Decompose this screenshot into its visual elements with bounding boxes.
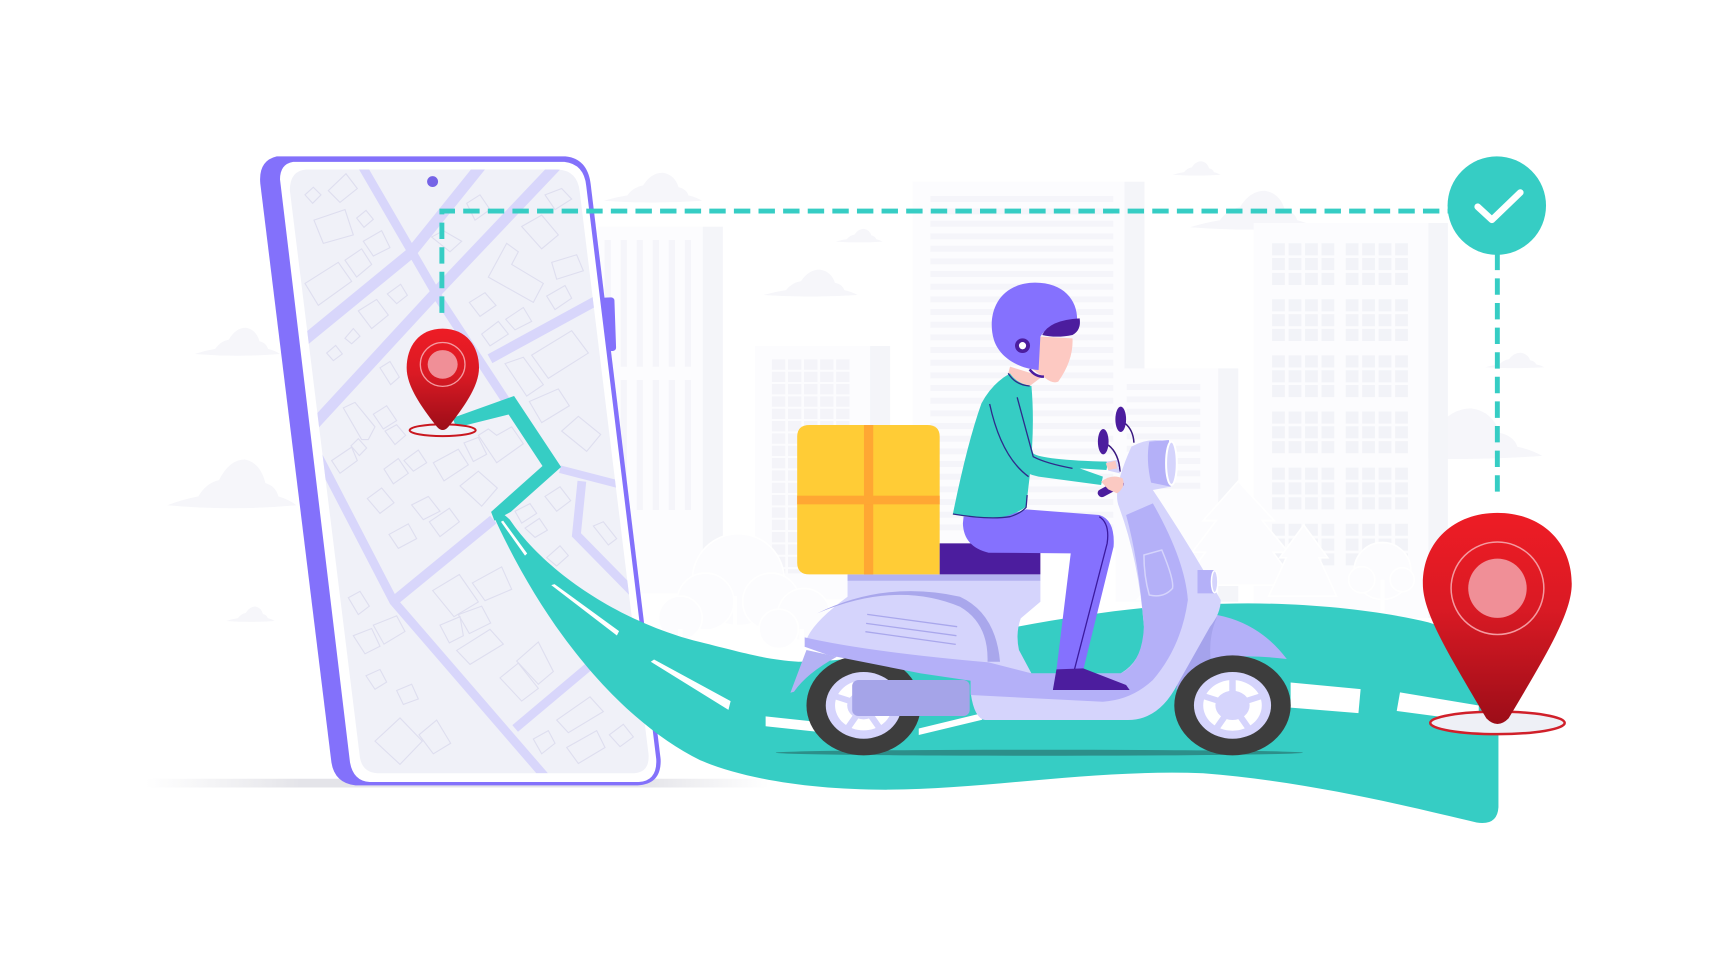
rider face	[1030, 337, 1073, 382]
shirt lines	[953, 373, 1073, 518]
muffler	[852, 680, 970, 716]
scooter dark band	[805, 503, 1188, 702]
map building outlines	[305, 174, 633, 764]
building: right middle tower	[1116, 368, 1238, 602]
destination location pin	[1423, 513, 1572, 734]
pin ring	[1451, 542, 1544, 634]
building: small middle tower	[755, 346, 890, 599]
helmet	[992, 283, 1077, 370]
helmet visor	[1042, 318, 1080, 337]
ground shadow under phone	[145, 779, 769, 788]
rider shoe	[1053, 668, 1130, 690]
phone	[260, 156, 661, 785]
route line on map	[453, 396, 561, 521]
pin center	[1468, 559, 1527, 618]
phone camera	[427, 176, 438, 187]
trees	[658, 481, 1414, 662]
pin base ring	[1430, 712, 1565, 734]
map roads	[295, 164, 634, 779]
rear fender	[790, 650, 837, 693]
check mark badge	[1448, 156, 1546, 255]
map area	[290, 170, 649, 773]
phone screen bezel	[280, 162, 656, 782]
rear cowl	[805, 581, 1040, 673]
rider arm	[1003, 397, 1108, 485]
scooter and rider	[776, 283, 1303, 756]
scooter lower frame	[971, 440, 1221, 720]
pin base ring	[410, 424, 476, 436]
handlebar grip and hands	[1096, 460, 1125, 498]
front fender	[1176, 615, 1287, 690]
delivery box	[797, 425, 940, 574]
phone side button	[602, 297, 616, 351]
rider torso	[953, 373, 1033, 518]
rider trousers	[963, 509, 1114, 670]
front wheel	[1174, 655, 1291, 755]
phone body	[260, 156, 661, 785]
road lane markings	[501, 521, 1479, 735]
background: city skyline	[167, 161, 1544, 662]
turn signal	[1198, 570, 1218, 593]
pin body	[407, 329, 479, 430]
building: center tall tower	[912, 182, 1145, 548]
chin strap	[1030, 369, 1044, 377]
cowl trim	[817, 591, 1000, 662]
helmet ear button	[1015, 338, 1030, 353]
building: right tower with windows	[1254, 223, 1448, 618]
road surface	[492, 510, 1498, 823]
badge circle	[1448, 156, 1546, 255]
start location pin	[407, 329, 479, 436]
headlight	[1148, 440, 1177, 487]
rear wheel	[806, 655, 921, 755]
clouds	[167, 161, 1544, 622]
pin center	[428, 350, 458, 379]
scooter ground shadow	[776, 750, 1303, 756]
dashed tracking route	[442, 211, 1497, 499]
leg shield pocket	[1144, 550, 1173, 596]
delivery box rack	[848, 574, 1040, 581]
pin ring	[420, 342, 465, 386]
trouser seam	[1074, 517, 1108, 670]
road	[453, 396, 1498, 823]
rider neck	[1008, 367, 1042, 386]
seat	[940, 543, 1040, 574]
building: left tower	[598, 227, 723, 593]
pin body	[1423, 513, 1572, 724]
cowl vent lines	[865, 614, 957, 644]
mirrors	[1098, 407, 1134, 472]
check icon	[1478, 192, 1520, 220]
